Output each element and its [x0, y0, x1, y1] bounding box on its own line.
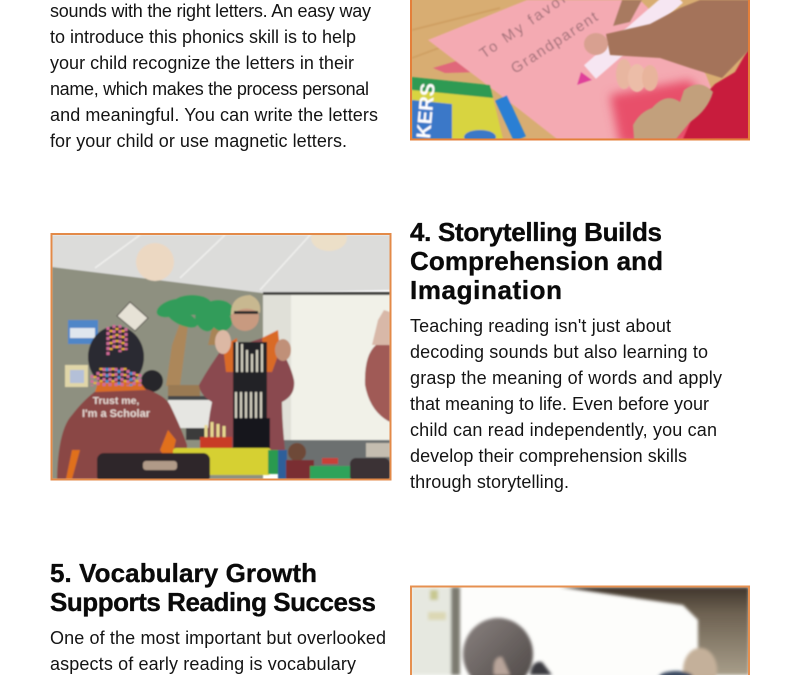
text block: section 3 paragraph: sounds with the right letters. An easy way [50, 1, 371, 21]
child's head [463, 618, 533, 675]
heading: section 4: Comprehension and [410, 246, 663, 276]
heading: section 5 [50, 558, 376, 617]
teacher [199, 295, 294, 455]
text block: section 4 paragraph: through storytelling. [410, 472, 569, 492]
photo: teacher reading to class [52, 225, 390, 483]
text block: section 4 paragraph: that meaning to life. Even before your [410, 394, 709, 414]
student with beaded hair: I'm a Scholar [82, 408, 151, 420]
paper shadow sheet [433, 60, 470, 74]
text block: section 3 paragraph: for your child or use magnetic letters. [50, 131, 347, 151]
pink marker [590, 0, 677, 72]
text block: section 5 paragraph: aspects of early reading is vocabulary [50, 654, 356, 674]
text block: section 5 paragraph [50, 628, 386, 674]
text block: section 4 paragraph: child can read independently, you can [410, 420, 717, 440]
text block: section 3 paragraph: and meaningful. You can write the letters [50, 105, 378, 125]
photo: children by a bright window [410, 586, 750, 675]
supplies on table [173, 422, 390, 479]
text block: section 3 paragraph: to introduce this phonics skill is to help [50, 27, 356, 47]
marker box [412, 89, 504, 138]
raised arm of student on right [365, 310, 390, 422]
student with beaded hair: Trust me, [93, 395, 139, 407]
blue marker [501, 98, 520, 139]
palm tree [166, 323, 188, 386]
heading: section 5: Supports Reading Success [50, 587, 376, 617]
text block: section 4 paragraph [410, 316, 722, 492]
heading: section 4 [410, 217, 663, 305]
pink paper [428, 0, 720, 139]
handwriting on paper: Grandparent [508, 8, 602, 77]
text block: section 4 paragraph: Teaching reading isn't just about [410, 316, 671, 336]
writing hand [606, 0, 749, 78]
text block: section 3 paragraph: your child recognize the letters in their [50, 53, 354, 73]
photo: child writing on pink paper with marker [410, 0, 750, 145]
text block: section 3 paragraph [50, 1, 378, 151]
text block: section 3 paragraph: name, which makes the process personal [50, 79, 369, 99]
photo: child writing on pink paper with marker: KERS [413, 82, 440, 139]
red corner of photo [683, 48, 749, 139]
marker finger [613, 0, 642, 26]
heading: section 5: 5. Vocabulary Growth [50, 558, 317, 588]
student with beaded hair [57, 325, 187, 479]
heading: section 4: 4. Storytelling Builds [410, 217, 662, 247]
ceiling [52, 235, 390, 293]
text block: section 4 paragraph: decoding sounds but also learning to [410, 342, 708, 362]
red glow on paper [605, 75, 703, 138]
foreground chairs [96, 452, 390, 478]
wall [52, 267, 263, 479]
heading: section 4: Imagination [410, 275, 562, 305]
window frame [411, 587, 451, 675]
second child [683, 648, 717, 675]
text block: section 5 paragraph: One of the most important but overlooked [50, 628, 386, 648]
overhead shelf and wall [560, 587, 749, 675]
handwriting on paper [477, 0, 602, 77]
text block: section 4 paragraph: develop their comprehension skills [410, 446, 687, 466]
paper lanterns [136, 243, 174, 281]
second hand fingers [633, 84, 713, 139]
wall posters [68, 320, 98, 344]
back furniture [168, 396, 228, 400]
window [290, 294, 390, 441]
text block: section 4 paragraph: grasp the meaning of words and apply [410, 368, 722, 388]
